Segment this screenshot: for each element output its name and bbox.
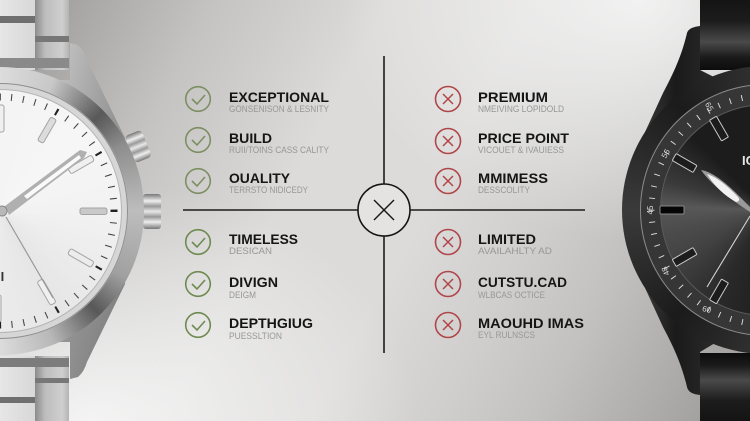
chapter ring numbers: 65 [703, 101, 716, 113]
hour indices [0, 105, 107, 322]
pro: build [186, 128, 329, 155]
hour hand [701, 170, 750, 212]
bracelet bottom [0, 356, 69, 421]
minute hand [0, 150, 87, 216]
con: price point: PRICE POINT [478, 130, 569, 146]
panel: pros [186, 87, 329, 341]
dark watch lugs [640, 26, 720, 395]
dark bezel [622, 66, 750, 354]
second hand [707, 216, 750, 287]
con: premium: NMEIVING LOPIDOLD [478, 104, 564, 114]
pro: quality [186, 169, 308, 195]
silver bezel [0, 67, 144, 355]
chapter ring numbers [646, 101, 716, 315]
pro: depthgiug: DEPTHGIUG [229, 315, 313, 331]
con: cutstucad [436, 272, 567, 300]
con: maouhd imas [436, 312, 584, 340]
pro: timeless [186, 230, 298, 256]
con: limited: LIMITED [478, 231, 536, 247]
panel: cons [436, 86, 584, 340]
con: limited: AVAILAHLTY AD [478, 246, 553, 256]
pro: quality: OUALITY [229, 170, 291, 186]
pro: divign: DEIGM [229, 290, 256, 300]
pro: build: RUII/TOINS CASS CALITY [229, 145, 329, 155]
minute ticks [652, 96, 750, 324]
strap bottom [700, 353, 750, 421]
pro: divign [186, 272, 278, 300]
center x icon [358, 184, 410, 236]
con: mmimess: MMIMESS [478, 170, 548, 186]
con: mmimess: DESSCOLITY [478, 185, 530, 195]
crowns [124, 130, 161, 229]
bracelet top [0, 0, 69, 70]
left silver watch [0, 0, 161, 421]
con: mmimess [436, 168, 548, 195]
con: cutstucad: WLBCAS OCTICE [478, 290, 545, 300]
con: maouhd imas: MAOUHD IMAS [478, 315, 584, 331]
pro: divign: DIVIGN [229, 274, 278, 290]
second hand [6, 217, 53, 298]
vertical divider [383, 56, 385, 353]
con: maouhd imas: EYL RULNSCS [478, 330, 535, 340]
chapter ring numbers: 45 [646, 205, 655, 214]
pro: quality: TERRSTO NIDICEDY [229, 185, 308, 195]
pro: timeless: TIMELESS [229, 231, 298, 247]
con: cutstucad: CUTSTU.CAD [478, 274, 567, 290]
con: limited [436, 230, 553, 256]
chapter ring numbers: 48 [660, 265, 672, 277]
right black watch [622, 0, 750, 421]
horizontal divider [183, 209, 585, 211]
con: premium [436, 86, 564, 114]
pro: exceptional [186, 87, 329, 114]
pro: depthgiug: PUESSLTION [229, 331, 282, 341]
pro: depthgiug [186, 313, 313, 341]
strap top [700, 0, 750, 70]
con: price point [436, 128, 569, 155]
black dial [640, 84, 750, 336]
chapter ring numbers: 60 [701, 304, 713, 315]
pro: build: BUILD [229, 130, 272, 146]
hour ticks [0, 97, 114, 325]
pro: timeless: DESICAN [229, 246, 272, 256]
hour indices [660, 116, 728, 304]
watch lugs [40, 43, 125, 379]
pro: exceptional: GONSENISON & LESNITY [229, 104, 329, 114]
con: price point: VICOUET & IVAUIESS [478, 145, 564, 155]
chapter ring numbers: 56 [660, 147, 672, 160]
pro: exceptional: EXCEPTIONAL [229, 89, 329, 105]
white dial [0, 83, 128, 339]
con: premium: PREMIUM [478, 89, 548, 105]
minute ticks [0, 97, 114, 325]
